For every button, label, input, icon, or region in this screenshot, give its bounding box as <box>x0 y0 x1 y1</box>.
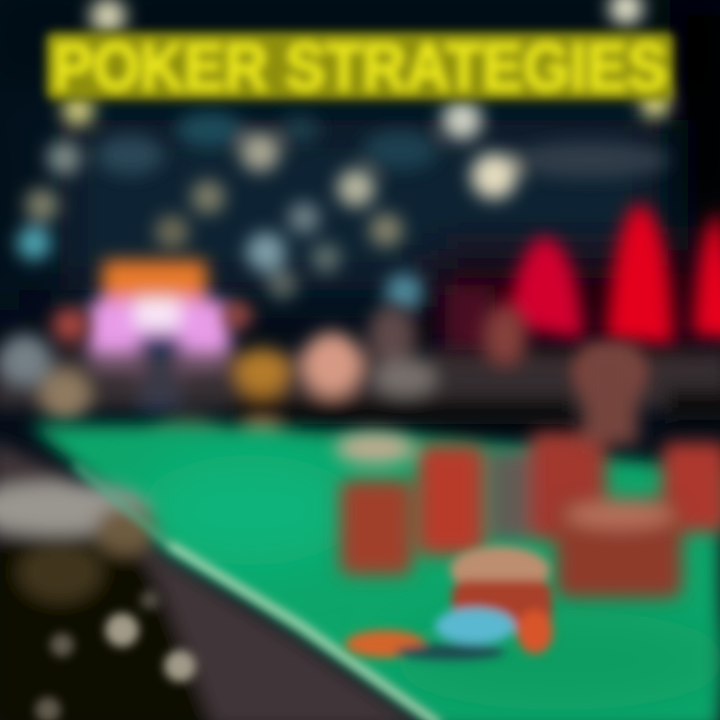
red stage lights <box>445 203 720 350</box>
neon sign: pink and orange <box>88 260 230 410</box>
table edge: white line <box>75 465 440 720</box>
background lights: bokeh dots <box>17 0 670 311</box>
poker table: green felt <box>30 425 720 720</box>
chip stacks: red <box>335 345 720 598</box>
crowd and bar counter <box>0 301 720 468</box>
scattered chips on the rail <box>35 590 196 720</box>
chip pile: orange and blue <box>345 546 553 660</box>
table rail: grey floor and dark corner <box>0 440 430 720</box>
